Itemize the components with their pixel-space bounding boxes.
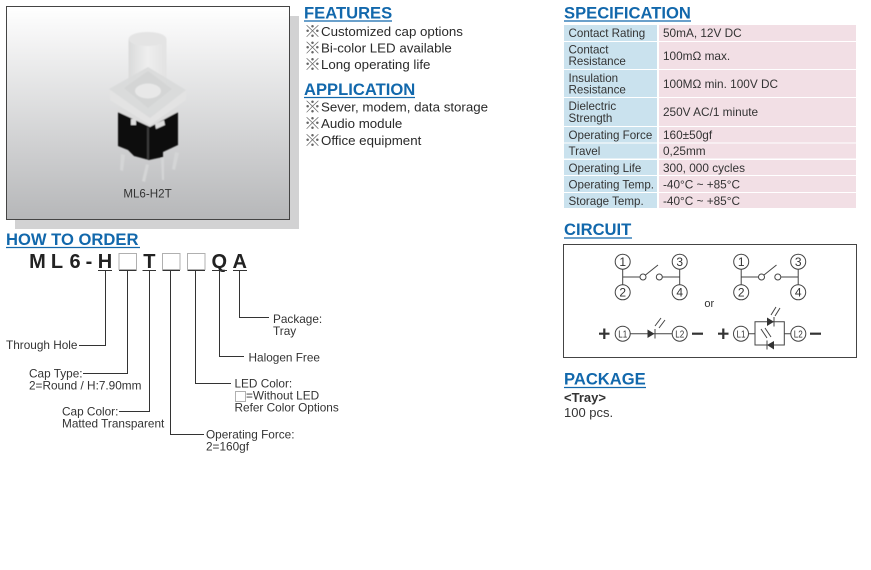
heading: specification: SPECIFICATION [564,4,691,22]
switch diagram: right: 4 [795,286,802,300]
callout: cap color: Matted Transparent [62,416,165,430]
table: specification: Resistance [568,55,626,68]
switch diagram: left [615,254,687,300]
switch diagram: right [734,254,806,300]
LED circuit: bi-color: L2 [794,329,803,340]
part number code: H [98,251,112,273]
callout: package [240,270,322,338]
list: features: Customized cap options [321,24,463,39]
part number code: A [232,251,247,273]
table: specification: 250V AC/1 minute [663,105,759,119]
table: specification: 300, 000 cycles [663,161,745,175]
list: features: ※ [304,34,321,59]
callout: LED color: Refer Color Options [234,400,339,414]
part number code: L [51,251,63,273]
list: application: ※ [304,93,321,118]
callout: cap type [29,270,142,392]
part number code: Q [212,251,227,273]
callout: LED color: =Without LED [246,388,319,402]
heading: features: FEATURES [304,4,392,22]
label: or: or [704,298,715,310]
caption: model name: ML6-H2T [123,188,172,200]
list: application: Office equipment [321,133,422,148]
callout: cap color [62,270,165,430]
table: specification: Travel [568,145,600,158]
LED circuit: single color [599,318,703,341]
callout: package: Tray [273,324,296,338]
table: specification: -40°C ~ +85°C [663,178,740,192]
switch diagram: right: 1 [738,255,745,269]
heading: how to order: HOW TO ORDER [6,230,138,249]
list: features: Bi-color LED available [321,40,452,56]
panel: circuit diagram [564,244,856,358]
text: package details: 100 pcs. [564,405,613,420]
switch diagram: left: 3 [676,255,683,269]
table: specification: 0,25mm [663,144,706,158]
list: application [304,93,488,152]
table: specification: Storage Temp. [568,195,644,208]
table: specification: Contact [568,44,609,56]
list: application: ※ [304,110,321,134]
callout: halogen free: Halogen Free [248,350,320,364]
callout: cap color: Cap Color: [62,404,118,418]
callout: cap type: 2=Round / H:7.90mm [29,378,142,392]
table: specification: Insulation [568,72,618,85]
text: package details [564,390,613,420]
list: application: Sever, modem, data storage [321,100,488,114]
heading: application: APPLICATION [304,80,415,99]
callout: LED color [196,270,339,414]
callout: cap type: Cap Type: [29,366,83,380]
table: specification: Strength [568,112,612,125]
table: specification: Contact Rating [568,27,645,40]
list: application: ※ [304,126,321,152]
heading: package: PACKAGE [564,370,646,388]
table: specification: 100MΩ min. 100V DC [663,77,779,91]
icon: push switch ML6-H2T [109,32,186,182]
callout: halogen free [220,270,320,364]
list: features: ※ [304,18,321,42]
list: features: Long operating life [321,57,430,72]
part number code: T [143,251,155,273]
switch diagram: left: 1 [619,255,626,269]
table: specification [564,25,856,208]
LED circuit: single color: L2 [675,329,685,340]
table: specification: Resistance [568,84,626,96]
part number code: 6 [69,251,81,273]
switch diagram: left: 2 [619,286,626,300]
table: specification: -40°C ~ +85°C [663,194,740,208]
callout: operating force [170,270,295,454]
callout: through hole: Through Hole [6,338,78,352]
LED circuit: bi-color: L1 [736,329,746,340]
part number code: M [29,251,46,273]
text: package details: <Tray> [564,390,606,405]
callout: operating force: 2=160gf [206,440,250,454]
switch diagram: right: 2 [738,286,745,300]
table: specification: 50mA, 12V DC [663,26,742,40]
list: features [304,18,463,76]
table: specification: 160±50gf [663,128,713,142]
LED circuit: single color: L1 [618,329,628,340]
table: specification: 100mΩ max. [663,49,730,63]
callout: operating force: Operating Force: [206,428,295,442]
callout: package: Package: [273,312,322,326]
table: specification: Operating Force [568,129,652,142]
table: specification: Operating Life [568,162,641,175]
part number code: - [86,251,92,273]
table: specification: Operating Temp. [568,178,654,192]
list: features: ※ [304,50,321,76]
panel: product photo [6,6,299,229]
LED circuit: bi-color [718,307,821,350]
table: specification: Dielectric [568,100,616,113]
switch diagram: left: 4 [676,286,683,300]
part number code [29,251,247,273]
callout: through hole [6,270,106,352]
callout: LED color: LED Color: [234,376,292,390]
heading: circuit: CIRCUIT [564,220,631,239]
list: application: Audio module [321,116,402,131]
switch diagram: right: 3 [795,255,802,269]
